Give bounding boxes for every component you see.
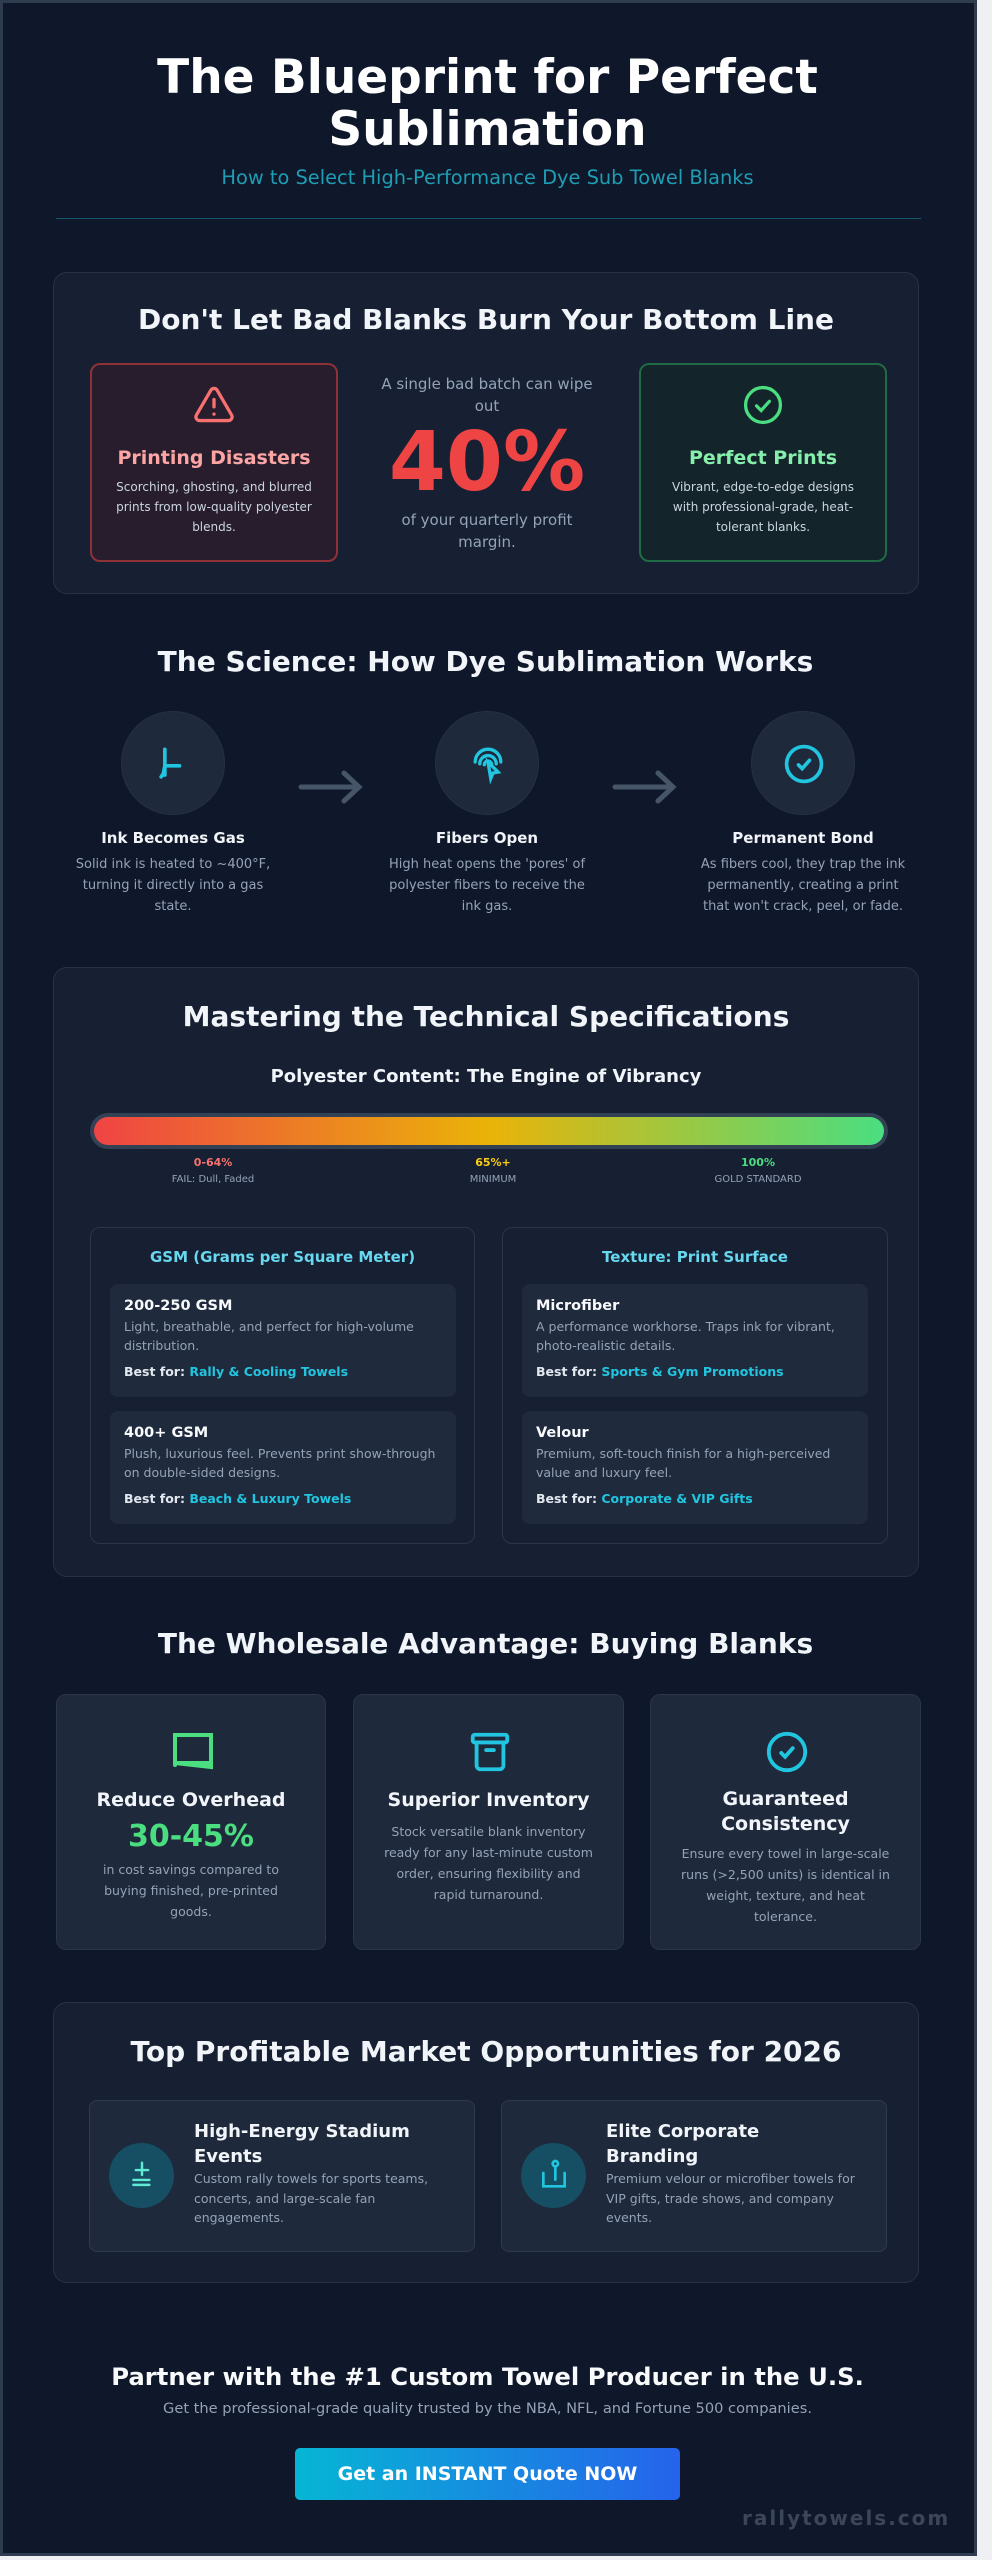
panel: bad blanks	[53, 272, 919, 594]
card: stadium: High-Energy Stadium Events	[194, 2121, 410, 2167]
panel: technical specs: 100%	[741, 1156, 775, 1169]
card: corporate: Elite Corporate Branding	[606, 2121, 759, 2167]
panel: technical specs: MINIMUM	[470, 1174, 516, 1185]
item: velour: Premium, soft-touch finish for a high-perceived value and luxury feel.	[536, 1446, 830, 1480]
item: velour: Best for: Corporate & VIP Gifts	[536, 1491, 753, 1506]
card: printing disasters	[90, 363, 338, 562]
icon: overhead	[173, 1733, 213, 1770]
step 2: High heat opens the 'pores' of polyester fibers to receive the ink gas.	[389, 857, 585, 914]
card: stadium	[89, 2100, 475, 2252]
card: consistency: Ensure every towel in large-scale runs (>2,500 units) is identical in weight, texture, and heat tolerance.	[681, 1846, 890, 1924]
card: Texture: Texture: Print Surface	[602, 1248, 788, 1266]
step 2	[389, 711, 586, 914]
CTA button: Get an INSTANT Quote NOW	[338, 2463, 637, 2485]
heading: wholesale: The Wholesale Advantage: Buying Blanks	[158, 1627, 813, 1660]
footer brand: rallytowels.com	[742, 2506, 950, 2530]
card: perfect prints	[639, 363, 887, 562]
icon: ink	[121, 711, 225, 815]
icon: box	[470, 1732, 510, 1772]
stat: 40%: A single bad batch can wipe out	[381, 375, 593, 415]
panel: technical specs	[53, 967, 919, 1577]
gradient bar	[90, 1113, 888, 1149]
item: 400+ GSM: Plush, luxurious feel. Prevents print show-through on double-sided designs.	[124, 1446, 435, 1480]
stat: 40%	[381, 375, 593, 551]
title: The Blueprint for Perfect	[157, 50, 818, 105]
item: 200-250: Best for: Rally & Cooling Towels	[124, 1364, 348, 1379]
icon: stadium	[109, 2143, 174, 2208]
item: 200-250	[110, 1284, 456, 1397]
item: velour	[522, 1411, 868, 1524]
arrow 1	[298, 770, 362, 804]
arrow 2	[612, 770, 676, 804]
bar labels: FAIL: Dull, Faded	[172, 1174, 254, 1185]
CTA subtext: Get the professional-grade quality trusted by the NBA, NFL, and Fortune 500 companies.	[163, 2400, 812, 2417]
step 1: Ink Becomes Gas	[101, 829, 245, 847]
item: velour: Velour	[536, 1425, 589, 1441]
subheading: polyester: Polyester Content: The Engine of Vibrancy	[271, 1066, 701, 1087]
card: consistency: Consistency	[721, 1813, 850, 1835]
stat: 40%: 40%	[389, 415, 585, 510]
step 3: Permanent Bond	[732, 829, 874, 847]
item: microfiber: Best for: Sports & Gym Promotions	[536, 1364, 784, 1379]
step 1	[76, 711, 270, 914]
card: GSM: GSM (Grams per Square Meter)	[150, 1248, 415, 1266]
card: inventory	[353, 1694, 624, 1950]
item: 400+ GSM: 400+ GSM	[124, 1425, 208, 1441]
bar labels	[172, 1156, 254, 1185]
card: printing disasters: Printing Disasters	[117, 447, 311, 469]
card: printing disasters: Scorching, ghosting, and blurred prints from low-quality polyester blends.	[116, 480, 312, 534]
card: reduce overhead	[56, 1694, 326, 1950]
item: 200-250: Light, breathable, and perfect for high-volume distribution.	[124, 1319, 414, 1353]
icon: warning	[194, 386, 234, 422]
item: 400+ GSM: Best for: Beach & Luxury Towels	[124, 1491, 351, 1506]
CTA heading: Partner with the #1 Custom Towel Producer in the U.S.	[111, 2362, 864, 2391]
panel: technical specs: GOLD STANDARD	[714, 1174, 802, 1185]
card: consistency: Guaranteed	[722, 1788, 849, 1810]
item: microfiber: Microfiber	[536, 1298, 619, 1314]
card: GSM	[90, 1227, 475, 1544]
stat: 40%: of your quarterly profit margin.	[401, 511, 573, 551]
card: Texture	[502, 1227, 888, 1544]
card: corporate: Premium velour or microfiber towels for VIP gifts, trade shows, and company events.	[606, 2171, 855, 2225]
heading: bad blanks: Don't Let Bad Blanks Burn Your Bottom Line	[138, 303, 834, 336]
heading: specs: Mastering the Technical Specifications	[183, 1000, 789, 1033]
item: 200-250: 200-250 GSM	[124, 1298, 232, 1314]
heading: science: The Science: How Dye Sublimation Works	[158, 645, 813, 678]
card: inventory: Stock versatile blank inventory ready for any last-minute custom order, ensuring flexibility and rapid turnaround.	[384, 1824, 593, 1902]
bar labels: 0-64%	[194, 1156, 232, 1169]
card: perfect prints: Perfect Prints	[689, 447, 837, 469]
card: reduce overhead: in cost savings compared to buying finished, pre-printed goods.	[103, 1862, 279, 1919]
CTA button	[295, 2448, 680, 2500]
card: inventory: Superior Inventory	[388, 1789, 589, 1811]
step 1: Solid ink is heated to ~400°F, turning it directly into a gas state.	[76, 857, 270, 914]
card: stadium: Custom rally towels for sports teams, concerts, and large-scale fan engagements.	[194, 2171, 428, 2225]
icon: bond	[751, 711, 855, 815]
step 3	[701, 711, 905, 914]
card: reduce overhead: Reduce Overhead	[96, 1789, 286, 1811]
card: reduce overhead: 30-45%	[128, 1819, 254, 1854]
panel: technical specs: 65%+	[475, 1156, 511, 1169]
panel: market opportunities	[53, 2002, 919, 2283]
subtitle: How to Select High-Performance Dye Sub Towel Blanks	[221, 166, 754, 189]
heading: market: Top Profitable Market Opportunities for 2026	[130, 2035, 842, 2068]
icon: fibers	[435, 711, 539, 815]
icon: corporate	[521, 2143, 586, 2208]
item: microfiber: A performance workhorse. Traps ink for vibrant, photo-realistic details.	[536, 1319, 835, 1353]
title: Sublimation	[328, 102, 647, 157]
title	[157, 50, 818, 157]
step 3: As fibers cool, they trap the ink permanently, creating a print that won't crack, peel, or fade.	[701, 857, 905, 914]
card: consistency	[650, 1694, 921, 1950]
card: corporate	[501, 2100, 887, 2252]
item: 400+ GSM	[110, 1411, 456, 1524]
card: perfect prints: Vibrant, edge-to-edge designs with professional-grade, heat-tolerant blanks.	[672, 480, 854, 534]
item: microfiber	[522, 1284, 868, 1397]
icon: check	[744, 386, 782, 424]
icon: check	[766, 1732, 808, 1772]
step 2: Fibers Open	[436, 829, 538, 847]
